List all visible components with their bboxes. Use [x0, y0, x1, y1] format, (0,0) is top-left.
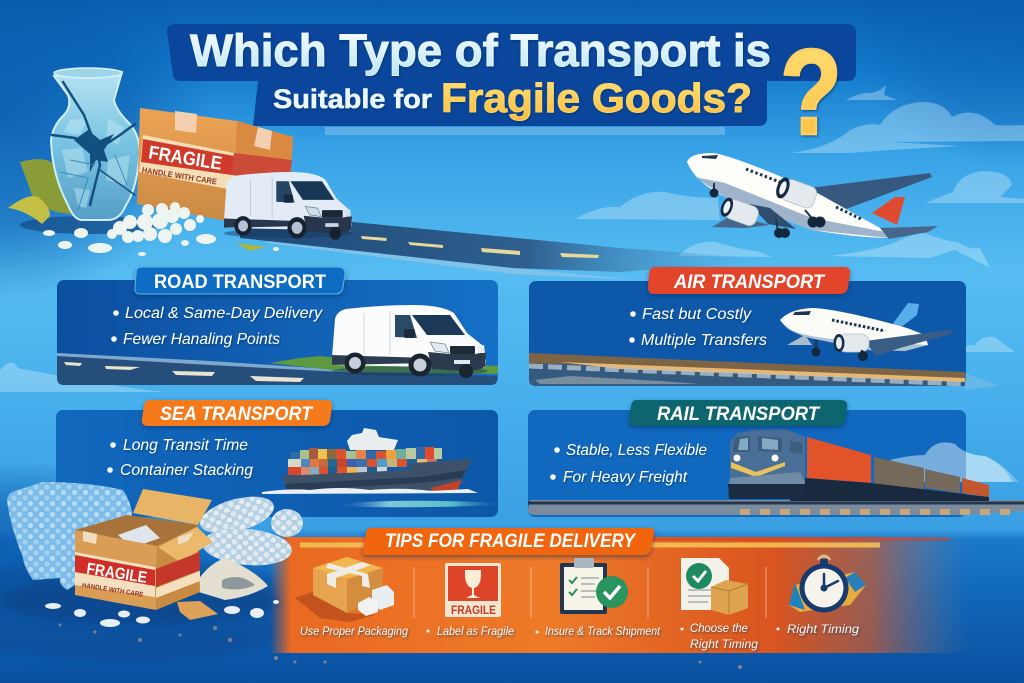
- icon: fragile label: [445, 563, 501, 617]
- rail bullets: Stable, Less Flexible: [566, 442, 707, 459]
- tip captions: Right Timing: [690, 639, 759, 651]
- tip captions: Use Proper Packaging: [300, 626, 409, 638]
- airplane: [780, 303, 954, 361]
- carton text: HANDLE WITH CARE: [81, 582, 144, 599]
- bubble wrap right: [192, 490, 303, 600]
- rail track: [528, 500, 1024, 515]
- title line one: Which Type of Transport is: [190, 25, 771, 76]
- tips badge: TIPS FOR FRAGILE DELIVERY: [385, 531, 637, 552]
- tip captions: Choose the: [690, 623, 748, 635]
- sea bullets: Long Transit Time: [123, 437, 248, 454]
- road bullets: [111, 305, 323, 348]
- clouds in the sky: [0, 85, 1024, 482]
- title banner: [167, 24, 856, 160]
- carton text: FRAGILE: [85, 561, 148, 587]
- panel: air transport: [529, 267, 1000, 390]
- road badge: ROAD TRANSPORT: [154, 272, 326, 293]
- illustration: bubble wrap and open carton: [0, 482, 742, 669]
- sea badge: [142, 400, 332, 426]
- road badge: [135, 267, 345, 294]
- rail badge: RAIL TRANSPORT: [657, 404, 820, 425]
- sea badge: SEA TRANSPORT: [160, 404, 313, 425]
- runway track: [529, 353, 1000, 390]
- van: [332, 305, 488, 378]
- sea bullets: [107, 437, 253, 479]
- carton text: [81, 560, 148, 599]
- illustration: fragile carton: [137, 108, 293, 222]
- illustration: delivery van: [224, 172, 353, 240]
- scattered debris: [45, 600, 742, 669]
- title line two: [273, 75, 752, 121]
- rail bullets: [550, 442, 707, 486]
- illustration: broken vase: [8, 68, 160, 234]
- panel: road transport: [57, 267, 498, 385]
- road bullets: Fewer Hanaling Points: [123, 331, 280, 348]
- bubble wrap left: [7, 482, 132, 590]
- packing peanuts: [43, 202, 279, 256]
- air badge: AIR TRANSPORT: [673, 272, 825, 293]
- ship: [262, 428, 478, 494]
- icon: document with parcel: [681, 558, 748, 615]
- icon: packaged box: [295, 557, 394, 622]
- rail bullets: For Heavy Freight: [563, 469, 688, 486]
- tip captions: Insure & Track Shipment: [545, 626, 661, 638]
- carton label: FRAGILE: [147, 143, 223, 175]
- panel: rail transport: [528, 400, 1024, 517]
- icon: stopwatch: [789, 556, 866, 612]
- icon: fragile label: FRAGILE: [451, 605, 496, 617]
- air bullets: [629, 306, 767, 349]
- title line two: Fragile Goods?: [441, 75, 752, 121]
- road strip: [57, 353, 498, 385]
- train: [728, 429, 989, 501]
- open carton: [75, 489, 213, 610]
- road bullets: Local & Same-Day Delivery: [125, 305, 323, 322]
- tip captions: Right Timing: [787, 624, 860, 636]
- cloud behind train: [890, 442, 1012, 482]
- panel: sea transport: [56, 400, 500, 517]
- highway: [240, 222, 760, 280]
- title line two: Suitable for: [273, 84, 433, 114]
- sea bullets: Container Stacking: [120, 462, 253, 479]
- air badge: [648, 267, 850, 294]
- air bullets: Fast but Costly: [642, 306, 752, 323]
- carton label: HANDLE WITH CARE: [141, 166, 218, 187]
- tip captions: [300, 623, 860, 651]
- icon: leaves: [8, 159, 75, 224]
- panel: tips for fragile delivery: [270, 528, 970, 653]
- carton label: [141, 142, 223, 187]
- icon: question mark: ?: [780, 24, 842, 160]
- illustration: airplane: [687, 153, 938, 239]
- icon: clipboard: [560, 558, 628, 614]
- tip captions: Label as Fragile: [437, 626, 514, 638]
- air bullets: Multiple Transfers: [641, 332, 767, 349]
- rail badge: [629, 400, 847, 426]
